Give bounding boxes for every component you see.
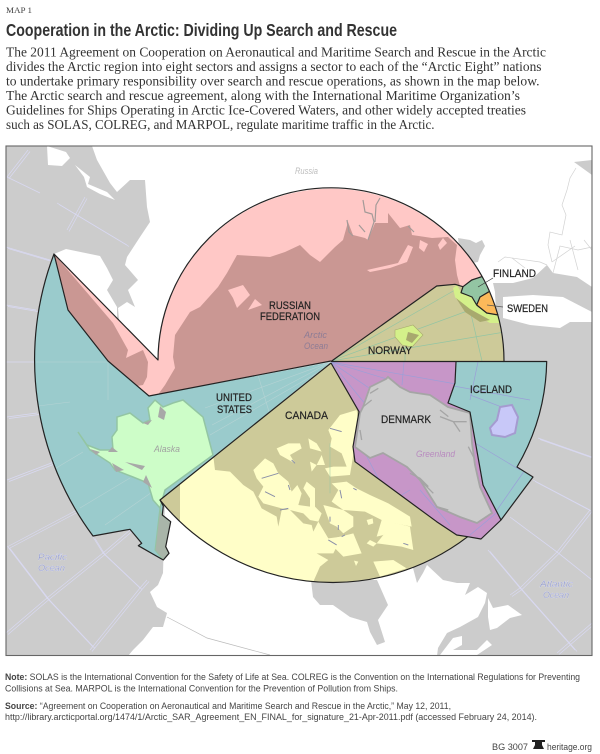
Svalbard <box>395 325 423 347</box>
label: Arctic Ocean <box>303 330 328 352</box>
label: Arctic Ocean: Arctic <box>303 330 327 341</box>
sector: Iceland <box>448 362 547 520</box>
map label: MAP 1 <box>6 5 32 15</box>
sector: United States <box>6 254 331 560</box>
ocean: White Sea <box>458 238 485 263</box>
label: United States: UNITED <box>216 392 252 404</box>
label: Sweden: SWEDEN <box>507 303 548 315</box>
ocean: Pacific <box>6 146 167 656</box>
label: Iceland: ICELAND <box>470 384 512 396</box>
source: http://library.arcticportal.org/1474/1/Arctic_SAR_Agreement_EN_FINAL_for_signature_21-Apr-2011.pdf (accessed February 24, 2014). <box>5 712 537 723</box>
bay: Hudson Bay <box>311 580 388 645</box>
intro text block <box>6 44 546 132</box>
label: Atlantic Ocean: Ocean <box>543 590 569 601</box>
Alaska land <box>78 400 213 508</box>
intro text block: The Arctic search and rescue agreement, along with the International Maritime Organization’s <box>6 88 520 103</box>
icon: liberty bell <box>532 740 545 749</box>
intro text block: The 2011 Agreement on Cooperation on Aeronautical and Maritime Search and Rescue in the Arctic <box>6 44 546 60</box>
label: Atlantic Ocean: Atlantic <box>539 579 573 590</box>
label: Pacific Ocean: Ocean <box>38 563 65 574</box>
title: Cooperation in the Arctic: Dividing Up Search and Rescue <box>6 20 397 40</box>
label: Norway: NORWAY <box>368 345 413 357</box>
ocean: Atlantic and Baltic <box>413 160 592 656</box>
map frame <box>6 146 592 656</box>
Canadian land <box>180 410 413 587</box>
leader: Finland <box>478 278 493 287</box>
sector: Sweden <box>477 292 498 315</box>
grid lines <box>6 362 331 525</box>
sector: Canada <box>160 363 468 587</box>
source: Source: “Agreement on Cooperation on Aeronautical and Maritime Search and Rescue in the Arctic,” May 12, 2011, <box>5 701 451 712</box>
leader: Sweden <box>487 305 503 307</box>
intro text block: to undertake primary responsibility over search and rescue operations, as shown in the map below. <box>6 74 540 88</box>
note: Collisions at Sea. MARPOL is the International Convention for the Prevention of Pollution from Ships. <box>5 684 398 694</box>
country borders <box>167 168 592 655</box>
label: Pacific Ocean: Pacific <box>38 552 67 563</box>
label: Russian Federation <box>260 300 320 323</box>
label: Russian Federation: FEDERATION <box>260 311 320 323</box>
Greenland <box>355 377 492 523</box>
Iceland island <box>490 405 518 437</box>
white land in Scandinavia <box>503 295 592 328</box>
Arctic Ocean shading <box>54 254 148 386</box>
sector: Russian Federation <box>54 189 482 396</box>
sector: Denmark <box>331 362 501 539</box>
ocean grid lines <box>6 150 594 654</box>
sector boundaries <box>35 188 547 582</box>
report number: BG 3007 <box>492 742 528 753</box>
sector: Norway <box>331 284 505 362</box>
label: Alaska: Alaska <box>153 444 180 455</box>
label: Atlantic Ocean <box>539 579 573 601</box>
Northern Norway coast <box>453 285 500 323</box>
label: Russian Federation: RUSSIAN <box>269 300 311 312</box>
sector: Finland <box>461 277 489 305</box>
label: Canada: CANADA <box>285 410 329 422</box>
label: Finland: FINLAND <box>493 268 536 280</box>
intro text block: divides the Arctic region into eight sectors and assigns a sector to each of the “Arctic Eight” nations <box>6 59 542 74</box>
intro text block: Guidelines for Ships Operating in Arctic Ice-Covered Waters, and other widely accepted treaties <box>6 102 526 118</box>
label: Russia: Russia <box>295 166 318 177</box>
label: Denmark: DENMARK <box>381 414 432 426</box>
intro text block: such as SOLAS, COLREG, and MARPOL, regulate maritime traffic in the Arctic. <box>6 117 434 132</box>
source <box>5 701 537 723</box>
white land in Pacific side <box>47 146 117 322</box>
label: Arctic Ocean: Ocean <box>304 341 328 352</box>
label: United States <box>216 392 252 416</box>
label: United States: STATES <box>217 404 252 416</box>
Southeast Alaska panhandle <box>155 507 171 560</box>
label: Pacific Ocean <box>38 552 67 574</box>
heritage.org: heritage.org <box>547 742 592 753</box>
note <box>5 672 580 694</box>
label: Greenland: Greenland <box>416 449 456 460</box>
map panel <box>6 146 594 656</box>
